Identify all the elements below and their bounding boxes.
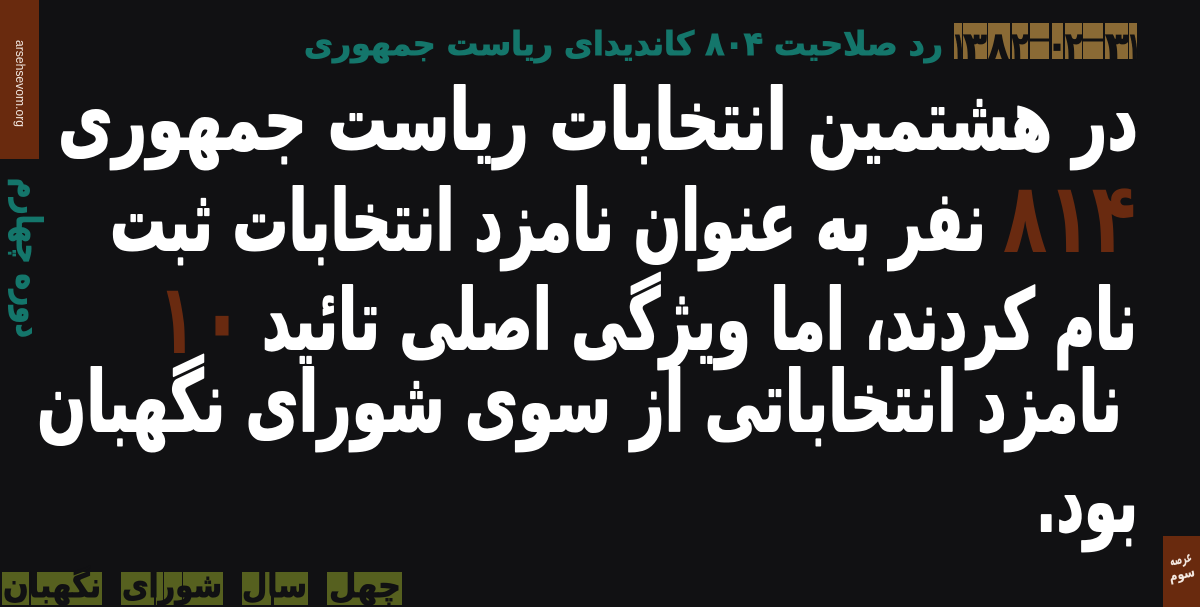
number: 10 approved: ۱ — [158, 263, 196, 377]
date digits: ۳ — [1105, 24, 1129, 68]
logo block — [1163, 536, 1200, 607]
date digits: ۰ — [1046, 23, 1068, 67]
date strip — [952, 23, 1141, 68]
footer words — [3, 566, 401, 606]
number: 10 approved — [158, 252, 245, 386]
main statement — [37, 71, 1138, 552]
date digits: ۸ — [988, 24, 1009, 68]
site address: arsehsevom.org — [13, 40, 28, 127]
number: 814 registered: ۸۱۴ — [1003, 162, 1136, 276]
date digits: ۱ — [1127, 24, 1141, 68]
date digits: ۲ — [1011, 24, 1029, 68]
number: 10 approved: ۰ — [199, 252, 245, 386]
vertical heading: term number: دوره چهارم — [8, 178, 48, 338]
footer words: سال — [242, 566, 307, 606]
line 5: بود. — [1036, 453, 1138, 552]
footer words: نگهبان — [3, 566, 101, 606]
top heading: رد صلاحیت ۸۰۴ کاندیدای ریاست جمهوری — [304, 24, 943, 64]
date digits — [952, 23, 1141, 68]
footer words: شورای — [122, 566, 222, 606]
date digits: ۳ — [963, 24, 987, 68]
date digits: ۱ — [952, 24, 966, 68]
footer series title — [2, 566, 402, 606]
footer words: چهل — [329, 566, 401, 606]
logo calligraphy — [1164, 548, 1196, 585]
date digits: ۲ — [1065, 24, 1083, 68]
panel: side tab with site address — [0, 0, 39, 159]
